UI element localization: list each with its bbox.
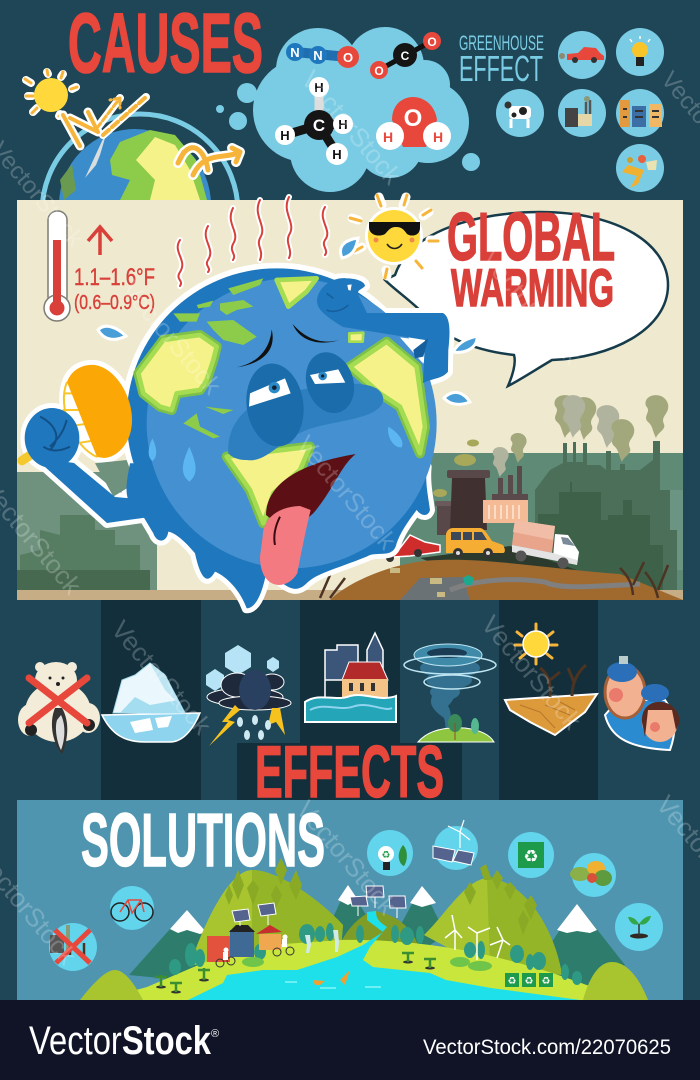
footer bbox=[0, 1000, 700, 1080]
icon: melting iceberg bbox=[102, 663, 200, 742]
icon: solar and wind bbox=[433, 820, 478, 870]
icon: sun bbox=[25, 70, 77, 116]
mouth bbox=[266, 454, 356, 524]
effects column stripes bbox=[0, 600, 700, 800]
heading: greenhouse effect: EFFECT bbox=[459, 48, 543, 89]
sticker outline bbox=[25, 268, 450, 608]
lake and river bbox=[188, 911, 580, 1000]
url text: VectorStock.com/22070625 bbox=[423, 1036, 671, 1059]
factory bbox=[435, 466, 528, 535]
sweat drops bbox=[149, 427, 402, 482]
background gap under arm bbox=[95, 460, 135, 497]
icon: cow bbox=[496, 89, 544, 137]
heading: greenhouse effect bbox=[459, 32, 544, 89]
watermark text: VectorStock bbox=[290, 430, 403, 556]
character: melting earth bbox=[22, 268, 450, 608]
icon: light bulb bbox=[616, 28, 664, 76]
illustration: earth with atmosphere and sun rays bbox=[25, 70, 240, 310]
arrows: incoming and reflected sunlight bbox=[63, 97, 240, 175]
icon: car bbox=[558, 31, 606, 79]
icon: sick children bbox=[605, 656, 680, 750]
hand bbox=[25, 408, 79, 468]
text: temperature rise: 1.1–1.6°F bbox=[74, 264, 155, 291]
molecule: water: H bbox=[433, 129, 443, 145]
icon: polar bear and penguin crossed out bbox=[18, 662, 100, 754]
molecule: methane: H bbox=[332, 147, 342, 162]
cyclists and runners bbox=[216, 930, 339, 967]
icon: buildings bbox=[616, 89, 664, 137]
watermark text: VectorStock bbox=[115, 275, 228, 401]
tongue bbox=[260, 506, 311, 585]
corner hills bbox=[80, 962, 648, 1000]
icon: bicycle bbox=[110, 886, 154, 930]
bubble: greenhouse gas molecules bbox=[216, 27, 480, 192]
molecule: methane: H bbox=[280, 128, 290, 143]
sprouts bbox=[155, 952, 436, 994]
molecule: nitrous oxide: N bbox=[313, 48, 323, 63]
heat waves bbox=[178, 197, 327, 286]
molecule: methane: C bbox=[313, 116, 325, 135]
arrow: temperature up bbox=[88, 227, 112, 255]
vehicle: red car bbox=[378, 535, 440, 562]
scene: polluted sky and city bbox=[17, 200, 683, 600]
watermark text: VectorStock bbox=[475, 610, 588, 736]
watermark text: VectorStock bbox=[105, 615, 218, 741]
fan bbox=[22, 365, 132, 461]
title: global warming bbox=[447, 199, 615, 318]
molecule: water bbox=[376, 97, 451, 150]
landscape: green planet bbox=[80, 858, 648, 1000]
molecule: nitrous oxide: O bbox=[343, 50, 353, 65]
melting body bbox=[126, 268, 430, 608]
icon: tornado bbox=[404, 644, 496, 742]
muzzle shadow bbox=[228, 384, 383, 460]
icon: eco bulb bbox=[367, 830, 413, 876]
icon: food waste bbox=[616, 144, 664, 192]
watermark text: VectorStock bbox=[475, 245, 588, 371]
panel: solutions bbox=[17, 798, 683, 1000]
icon: extreme storm bbox=[206, 645, 291, 746]
molecule: methane: H bbox=[338, 117, 348, 132]
recycling bins: ♻ bbox=[525, 976, 534, 987]
watermark text: VectorStock bbox=[295, 65, 408, 191]
solar panels on land bbox=[232, 886, 406, 926]
logo: vectorstock: VectorStock bbox=[29, 1019, 212, 1063]
icon: eco bulb: ♻ bbox=[382, 850, 391, 861]
village buildings bbox=[207, 925, 282, 962]
icon: flood bbox=[305, 633, 396, 722]
trademark mark: ® bbox=[211, 1028, 219, 1040]
round trees bbox=[169, 923, 582, 985]
speech bubble with title bbox=[385, 199, 668, 386]
icon: recycling bin: ♻ bbox=[523, 847, 539, 866]
eye bags bbox=[241, 346, 362, 450]
arm: holding fan bbox=[34, 457, 167, 523]
recycling bins: ♻ bbox=[508, 976, 517, 987]
icon: recycling bin bbox=[508, 832, 554, 878]
icon: no factories bbox=[49, 923, 97, 971]
icon: drought bbox=[505, 624, 597, 735]
wind turbines bbox=[445, 915, 510, 960]
thermometer bbox=[44, 211, 70, 321]
molecule: carbon dioxide: O bbox=[374, 64, 384, 78]
smoke plumes bbox=[433, 395, 668, 497]
sweat drops around earth bbox=[98, 238, 477, 404]
ground with polluted stream bbox=[320, 546, 683, 600]
continents bbox=[138, 335, 425, 523]
molecule: methane: H bbox=[314, 80, 324, 95]
panel: causes bbox=[25, 0, 664, 310]
icon: factory bbox=[558, 89, 606, 137]
molecule: water: O bbox=[404, 105, 422, 132]
icon: seedling bbox=[615, 903, 663, 951]
molecule: carbon dioxide bbox=[370, 32, 441, 79]
molecule: methane bbox=[275, 77, 353, 165]
eyes bbox=[249, 369, 345, 407]
islands and northern land bbox=[173, 278, 263, 438]
heading: solutions: SOLUTIONS bbox=[81, 798, 325, 882]
icon: sun with sunglasses bbox=[350, 195, 438, 278]
heading: effects: EFFECTS bbox=[255, 732, 444, 813]
recycling bins bbox=[505, 973, 553, 987]
watermark text: VectorStock bbox=[290, 795, 403, 921]
fish and ripples bbox=[285, 970, 381, 988]
text: temperature rise bbox=[74, 264, 155, 314]
vehicle: yellow taxi bbox=[446, 528, 505, 558]
molecule: nitrous oxide: N bbox=[290, 45, 300, 60]
eyebrows bbox=[237, 324, 342, 367]
panel: global warming bbox=[17, 195, 683, 608]
continents inner bbox=[138, 278, 425, 523]
mountains bbox=[129, 870, 625, 985]
recycling bins: ♻ bbox=[542, 976, 551, 987]
heading: greenhouse effect: GREENHOUSE bbox=[459, 32, 544, 55]
arm: wiping forehead bbox=[317, 278, 450, 383]
mainland bbox=[100, 940, 625, 1000]
vehicle: truck bbox=[512, 520, 579, 568]
panel: effects bbox=[18, 624, 680, 813]
icon: vegetables bbox=[570, 853, 616, 897]
face disc bbox=[147, 278, 437, 568]
molecule: nitrous oxide bbox=[286, 43, 359, 68]
molecule: carbon dioxide: O bbox=[427, 35, 437, 49]
molecule: carbon dioxide: C bbox=[401, 49, 410, 63]
molecule: water: H bbox=[383, 129, 393, 145]
text: temperature rise: (0.6–0.9°C) bbox=[74, 292, 155, 314]
pine trees bbox=[225, 858, 537, 935]
